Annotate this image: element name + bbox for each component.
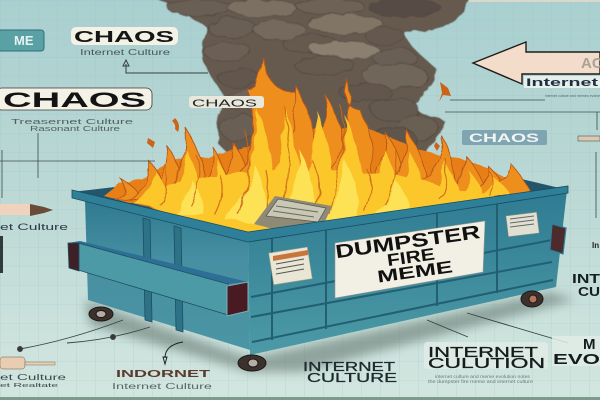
text: meme evolution cropped [552, 336, 600, 368]
arrow: large left arrow [473, 42, 600, 84]
text: indornet label: INDORNET [116, 368, 211, 380]
placard text [334, 222, 486, 292]
trash: newspaper [254, 196, 332, 232]
callout: chaos top [71, 27, 178, 46]
text: indornet label: Internet Culture [112, 382, 213, 391]
right bar end [550, 224, 566, 254]
text: small caption bottom: internet culture and meme evolution notes [435, 374, 531, 379]
leader lines bottom [427, 313, 568, 343]
text: culture caption: Rasonant Culture [30, 124, 120, 133]
text: indornet label [112, 368, 213, 391]
panel: dumpster shadow [85, 292, 575, 372]
connector line left [0, 236, 3, 273]
callout: chaos small [189, 96, 264, 110]
warning sticker front [269, 247, 312, 285]
text: internet culution [424, 342, 548, 372]
text: internet label [524, 76, 600, 89]
dumpster back opening [72, 177, 568, 238]
text: internet culture bottom [303, 359, 397, 385]
callout: chaos large: CHAOS [3, 89, 146, 112]
placard: dumpster fire meme [334, 221, 486, 298]
rim [72, 186, 568, 242]
callout: chaos small: CHAOS [192, 98, 257, 110]
text: meme evolution cropped: EVO [553, 351, 600, 368]
text: right-edge internet culture: INT [572, 271, 600, 286]
text: culture caption: Treasernet Culture [11, 117, 133, 126]
icon: pencil arrow upper left [0, 204, 53, 216]
placard text: FIRE [386, 245, 436, 270]
text: internet culution: CULUTION [428, 355, 545, 372]
text: culture label lower left: et Realtate [0, 383, 58, 389]
warning sticker right [506, 212, 539, 237]
arrow: down to indornet [163, 342, 183, 364]
flames [104, 57, 530, 236]
embers [147, 82, 451, 151]
placard text: DUMPSTER [334, 222, 482, 263]
callout: ME box [0, 30, 44, 51]
text: internet culture bottom: INTERNET [303, 359, 395, 374]
text: culture label lower left [0, 373, 67, 389]
wheels [89, 291, 543, 371]
text: small caption bottom: the dumpster fire meme and internet culture [428, 379, 534, 384]
right face ribs and bands [251, 200, 553, 342]
callout: ME box: ME [14, 33, 34, 48]
placard text: MEME [376, 257, 454, 287]
panel: smoke plume [150, 0, 472, 175]
text: internet culture bottom: CULTURE [307, 370, 397, 385]
left face ribs [143, 218, 183, 332]
text: right-edge internet culture [572, 271, 600, 299]
text: small caption bottom [428, 374, 534, 384]
text: culture caption [11, 117, 133, 133]
dumpster left face [85, 200, 250, 350]
connector lines bottom left [18, 320, 150, 352]
callout: chaos large [0, 88, 152, 112]
text: internet label: Internet [526, 77, 599, 89]
text: internet culution: INTERNET [428, 344, 538, 361]
panel: dumpster [68, 57, 568, 371]
arrow: up connector [123, 60, 208, 73]
connector lines right [445, 100, 600, 218]
callout: t-bar marker [578, 136, 600, 141]
callout: chaos teal: CHAOS [469, 131, 539, 145]
left bar [68, 241, 248, 316]
text: right-edge int: In [592, 241, 599, 250]
icon: pencil lower left [0, 357, 55, 369]
text: internet culture caption: Internet Culture [80, 48, 171, 57]
callout: chaos top: CHAOS [74, 29, 175, 46]
text: meme evolution cropped: M [583, 336, 596, 353]
text: culture label lower left: et Culture [0, 373, 67, 382]
connector lines left [0, 133, 155, 198]
text: right-edge internet culture: CU [578, 284, 600, 299]
dumpster right face [248, 190, 567, 355]
text: culture label upper left: et Culture [0, 222, 68, 232]
callout: chaos teal [462, 130, 547, 145]
